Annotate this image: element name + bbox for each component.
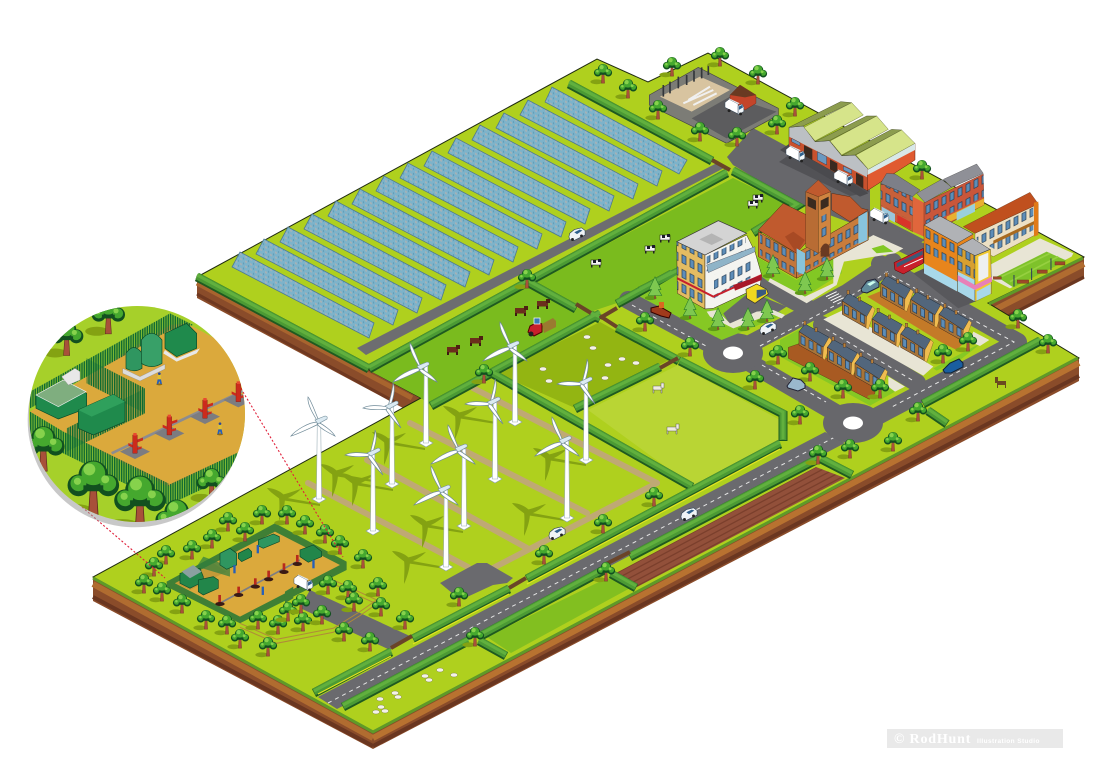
trees: substation and town (590, 47, 1057, 452)
wind farm car park (440, 563, 513, 597)
gas site compound (167, 523, 347, 623)
terrace: orange-roofed apartments (963, 192, 1038, 257)
red double-decker bus (894, 248, 923, 274)
field: ploughed land (616, 467, 845, 587)
housing: plots and pavements (780, 290, 989, 406)
warehouse (780, 102, 915, 197)
pocket park (987, 238, 1073, 288)
wind turbines (291, 322, 595, 571)
yellow ambulance (746, 284, 768, 303)
zebra crossing (826, 292, 844, 303)
modern mixed-use block (913, 216, 992, 308)
road network: town (628, 128, 1018, 443)
turbine shadows (267, 406, 586, 584)
tractors (528, 302, 671, 336)
road: main country road (318, 432, 845, 709)
office block (677, 221, 762, 309)
field: green strip by main road (487, 578, 632, 653)
land slab: side faces (93, 257, 1084, 749)
timber fencing around gas site (240, 580, 377, 643)
hedgerows (197, 82, 1040, 707)
grass rim (93, 258, 1083, 732)
field: horse paddock (588, 365, 780, 486)
inset circle: gas wellsite detail (28, 306, 245, 528)
substation compound (649, 65, 778, 143)
terrace: red brick shops (881, 164, 984, 237)
vehicles (294, 98, 963, 591)
field: dairy cow pasture (533, 178, 793, 312)
field: brown cattle pasture (372, 286, 600, 406)
yellow verge lines beside main road (318, 449, 780, 694)
solar farm: panel rows (232, 87, 687, 338)
watermark (887, 729, 1063, 748)
farm gates (391, 160, 730, 648)
town hall (758, 180, 868, 278)
watermark: Illustration Studio (977, 738, 1040, 745)
wind farm access tracks (308, 388, 657, 568)
conifers (645, 255, 834, 331)
road: lane to gas site (300, 590, 412, 650)
road: solar farm access (357, 163, 724, 355)
watermark: © RodHunt (894, 732, 971, 747)
housing: terraced rows (799, 273, 972, 392)
field: sheep paddock (496, 322, 669, 408)
livestock (372, 194, 1006, 714)
callout leader lines (82, 392, 343, 578)
town hall forecourt and lawn (753, 235, 903, 303)
trees: gas site and wind farm (131, 269, 859, 657)
office lawn and car park (640, 275, 787, 340)
